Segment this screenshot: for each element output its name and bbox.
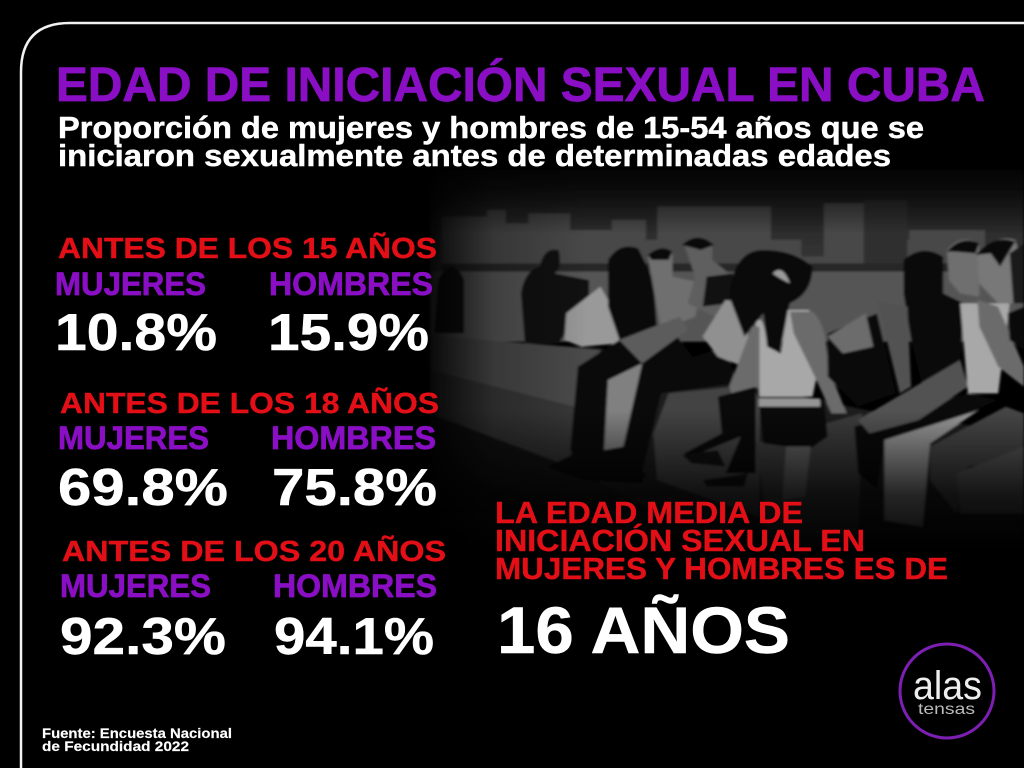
left silhouettes: [434, 250, 589, 343]
source note: de Fecundidad 2022: [42, 739, 189, 754]
panel: antes de los 15 años: HOMBRES: [269, 266, 433, 302]
subtitle: iniciaron sexualmente antes de determinadas edades: [58, 138, 891, 173]
icon: alas tensas logo: alas: [913, 664, 982, 708]
callout: edad media: INICIACIÓN SEXUAL EN: [495, 522, 865, 558]
panel: antes de los 15 años: 15.9%: [268, 304, 429, 362]
icon: alas tensas logo: [900, 644, 994, 738]
source note: Fuente: Encuesta Nacional: [42, 726, 232, 741]
panel: antes de los 18 años: 69.8%: [58, 459, 228, 517]
panel: antes de los 20 años: HOMBRES: [273, 568, 437, 604]
callout: edad media: 16 AÑOS: [497, 593, 790, 667]
panel: antes de los 20 años: ANTES DE LOS 20 AÑOS: [62, 534, 446, 568]
right men: [904, 251, 964, 387]
panel: antes de los 15 años: ANTES DE LOS 15 AÑOS: [58, 231, 437, 265]
panel: antes de los 18 años: ANTES DE LOS 18 AÑOS: [60, 386, 439, 420]
subtitle: Proporción de mujeres y hombres de 15-54 años que se: [58, 110, 924, 145]
panel: antes de los 15 años: [55, 231, 437, 362]
panel: antes de los 20 años: 92.3%: [60, 608, 226, 666]
subtitle: [58, 110, 924, 173]
bushes: [828, 313, 896, 407]
title: EDAD DE INICIACIÓN SEXUAL EN CUBA: [56, 57, 985, 112]
panel: antes de los 20 años: 94.1%: [274, 608, 434, 666]
source note: [42, 726, 232, 754]
panel: antes de los 20 años: MUJERES: [60, 568, 211, 604]
panel: antes de los 18 años: HOMBRES: [271, 420, 436, 456]
girl: [703, 300, 752, 370]
callout: edad media: MUJERES Y HOMBRES ES DE: [495, 551, 948, 586]
panel: antes de los 18 años: [58, 386, 439, 517]
panel: antes de los 15 años: 10.8%: [55, 304, 217, 362]
panel: antes de los 15 años: MUJERES: [55, 266, 206, 302]
icon: alas tensas logo: tensas: [918, 701, 975, 718]
panel: antes de los 20 años: [60, 534, 446, 666]
callout: edad media: [495, 495, 948, 667]
panel: antes de los 18 años: 75.8%: [272, 459, 437, 517]
callout: edad media: LA EDAD MEDIA DE: [495, 495, 803, 530]
panel: antes de los 18 años: MUJERES: [58, 420, 209, 456]
seated group: [608, 247, 657, 340]
